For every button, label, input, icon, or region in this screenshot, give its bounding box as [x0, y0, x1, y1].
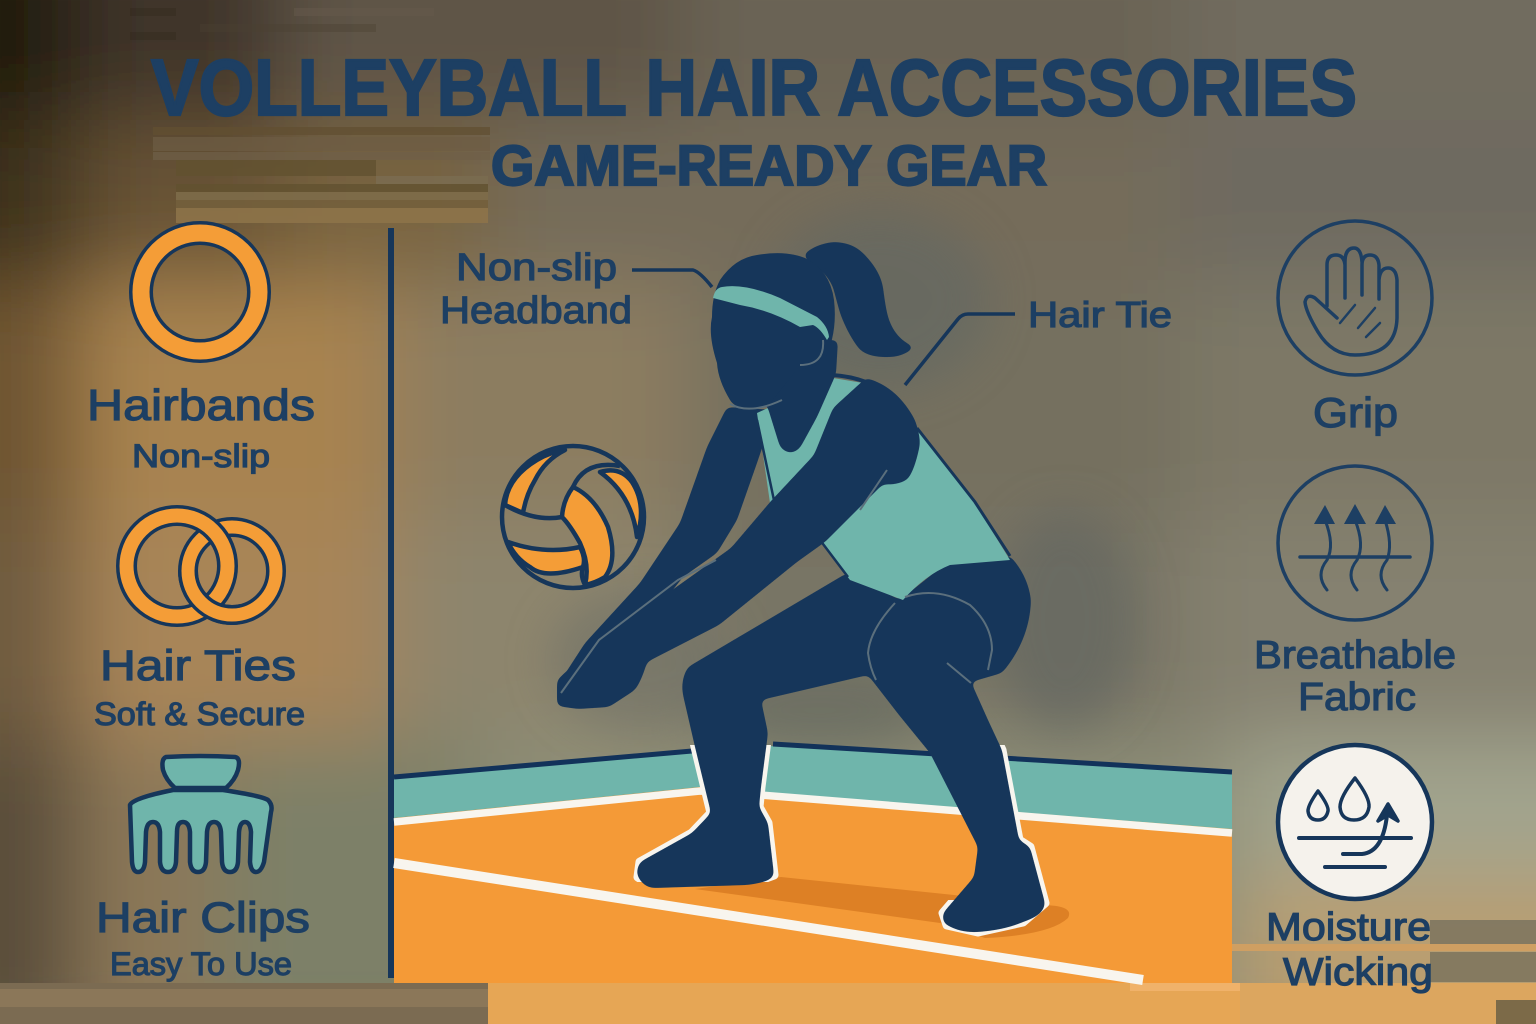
jersey [757, 378, 1010, 600]
legs and shorts [637, 556, 1045, 932]
far arm [561, 407, 775, 702]
ponytail [803, 242, 915, 357]
icon: volleyball [502, 446, 644, 588]
label: breathable fabric [1254, 634, 1456, 719]
vertical divider [388, 228, 394, 978]
label: hairbands: Hairbands [87, 381, 315, 430]
icon: hair ties [126, 516, 276, 616]
label: non-slip headband: Non-slip [456, 247, 617, 289]
icon: hairband ring [141, 233, 259, 351]
panel: right features [1254, 221, 1456, 994]
label: hair clips: Hair Clips [96, 894, 310, 942]
icon: hair clip [130, 756, 272, 872]
subtitle: GAME-READY GEAR [491, 134, 1047, 198]
dark smudge behind the player [550, 210, 1135, 750]
label: moisture wicking: Moisture [1266, 906, 1431, 949]
white cut-out outline [634, 745, 1050, 936]
label: soft and secure: Soft & Secure [94, 696, 305, 732]
label: moisture wicking: Wicking [1283, 951, 1433, 994]
leader: hair tie [905, 314, 1015, 385]
label: easy to use: Easy To Use [110, 946, 292, 982]
headband [713, 286, 829, 340]
court [394, 744, 1232, 983]
player [557, 242, 1045, 932]
label: breathable fabric: Breathable [1254, 634, 1456, 677]
near arm and shoulder [557, 378, 920, 709]
label: moisture wicking [1266, 906, 1433, 994]
title: VOLLEYBALL HAIR ACCESSORIES [151, 43, 1357, 132]
icon: moisture wicking [1278, 745, 1432, 899]
label: hair tie: Hair Tie [1028, 294, 1172, 335]
label: grip: Grip [1313, 389, 1398, 436]
label: non-slip headband: Headband [440, 290, 632, 332]
neck and chest [730, 340, 838, 453]
icon: breathable fabric [1278, 466, 1432, 620]
label: non-slip headband [440, 247, 632, 332]
label: hair ties: Hair Ties [100, 642, 296, 690]
label: non-slip: Non-slip [132, 438, 270, 474]
shoulder top edge [832, 375, 866, 382]
icon: grip hand [1278, 221, 1432, 375]
body contour lines [561, 340, 992, 693]
head [711, 253, 835, 408]
panel: left accessories [87, 233, 315, 982]
label: breathable fabric: Fabric [1298, 676, 1416, 719]
leader: non-slip headband [632, 270, 712, 287]
